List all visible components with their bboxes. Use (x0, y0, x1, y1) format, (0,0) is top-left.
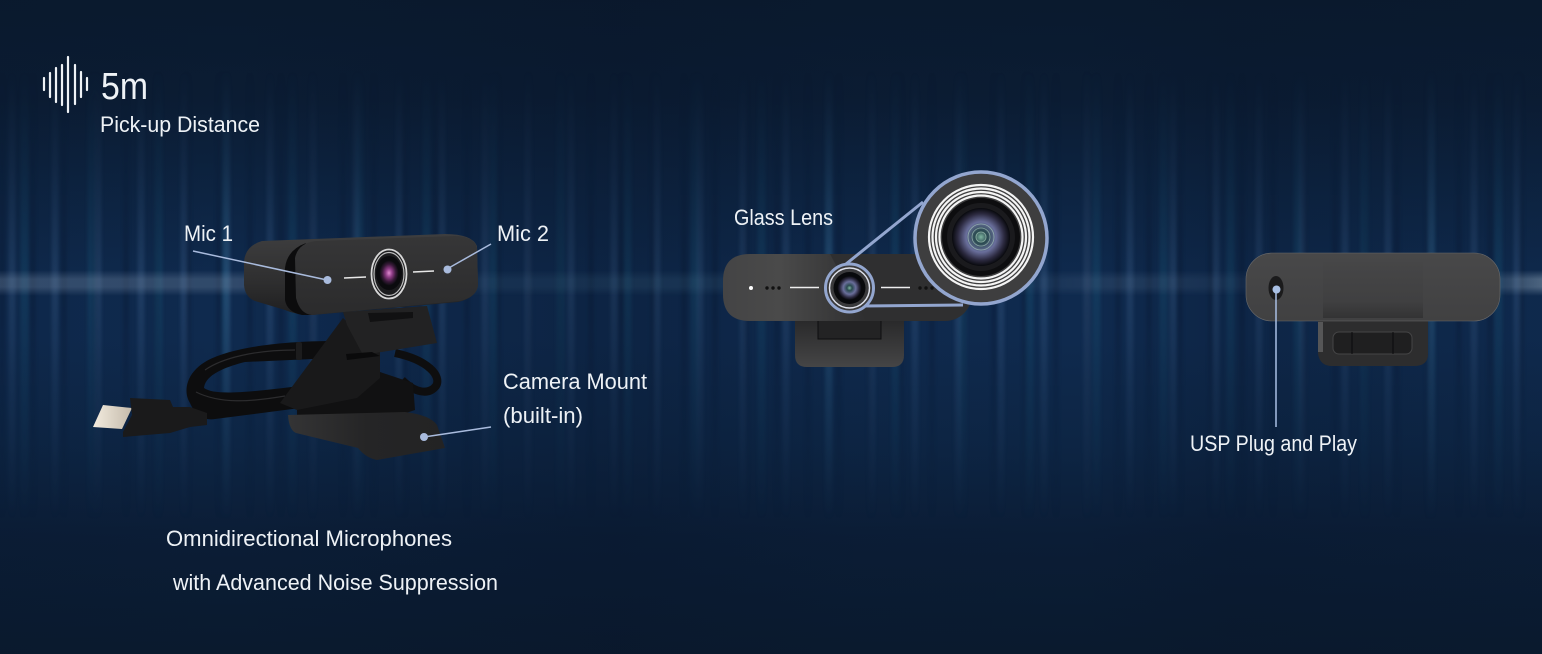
status dots and strips (749, 286, 934, 290)
heading: 5m: 5m (101, 66, 148, 108)
horizontal sound wave glow (0, 272, 1542, 294)
mount hinge (343, 306, 437, 355)
webcam 3: rear view (1246, 253, 1500, 366)
magnified lens (915, 172, 1047, 304)
usb plug (93, 405, 132, 429)
camera body (244, 234, 478, 315)
face strips (344, 277, 366, 278)
connector lines (846, 202, 963, 306)
callout: usb plug and play: USP Plug and Play (1190, 431, 1357, 456)
callout: usb plug and play (1190, 286, 1357, 456)
mount base (288, 412, 445, 460)
text: glass lens: Glass Lens (734, 205, 833, 230)
webcam 2: front view with lens magnifier (723, 172, 1047, 367)
usb cable (186, 341, 437, 419)
background stripes (0, 128, 1520, 460)
text: pick-up distance: Pick-up Distance (100, 112, 260, 137)
camera face (295, 236, 478, 315)
label plate (1323, 262, 1423, 318)
callout: camera mount: (built-in) (503, 403, 583, 428)
mount arm (280, 318, 380, 410)
mount hinge (1333, 332, 1412, 354)
mount (1318, 320, 1428, 366)
body highlight (723, 254, 866, 321)
usb slot (1268, 276, 1284, 300)
webcam 1: angled view with mount and cable (93, 234, 478, 460)
mount rear block (297, 372, 415, 418)
camera body (723, 254, 972, 321)
stand hinge (818, 320, 881, 339)
small lens (826, 264, 874, 312)
text: microphones caption (166, 526, 498, 595)
lens (371, 249, 407, 299)
callout: camera mount: Camera Mount (503, 369, 647, 394)
callout: mic 2: Mic 2 (497, 221, 549, 246)
callout: mic 1: Mic 1 (184, 221, 233, 246)
body shadow gap (285, 243, 312, 315)
stand (795, 320, 904, 367)
callout: mic 1 (184, 221, 332, 284)
text: microphones caption: Omnidirectional Microphones (166, 526, 452, 551)
mount side edge (1318, 322, 1323, 352)
callout: camera mount (420, 369, 647, 441)
usb connector (123, 398, 207, 437)
callout: mic 2 (444, 221, 549, 274)
camera body (1246, 253, 1500, 321)
text: microphones caption: with Advanced Noise Suppression (172, 570, 498, 595)
icon: sound wave (44, 57, 87, 112)
